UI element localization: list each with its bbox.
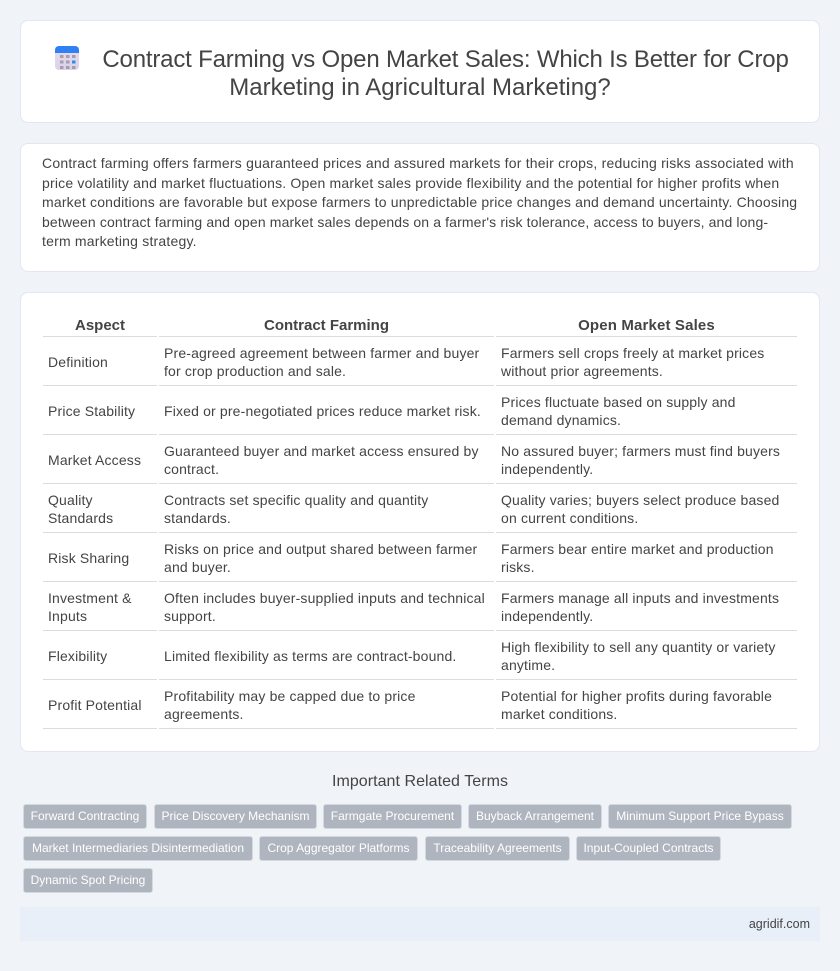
row: Flexibility: anytime. (501, 657, 555, 673)
row: Price Stability: demand dynamics. (501, 412, 621, 428)
row: Risk Sharing: Risks on price and output shared between farmer (164, 541, 477, 557)
tags: related terms: Minimum Support Price Bypass (616, 809, 784, 823)
footer bar (20, 907, 820, 941)
row: Market Access (48, 443, 780, 477)
tags: related terms: Traceability Agreements (433, 841, 562, 855)
row: Profit Potential: Profit Potential (48, 697, 142, 713)
icon: calendar (55, 46, 79, 70)
row: Market Access: Guaranteed buyer and market access ensured by (164, 443, 479, 459)
row: Flexibility: High flexibility to sell any quantity or variety (501, 639, 776, 655)
row: Quality Standards: Contracts set specific quality and quantity (164, 492, 428, 508)
intro paragraph: term marketing strategy. (42, 233, 197, 249)
title line 1: Contract Farming vs Open Market Sales: Which Is Better for Crop (102, 46, 789, 73)
intro paragraph: between contract farming and open market sales depends on a farmer's risk tolerance, access to buyers, and long- (42, 214, 768, 230)
row: Investment & Inputs: Inputs (48, 608, 87, 624)
heading: related terms: Important Related Terms (332, 773, 508, 790)
row: Flexibility: Limited flexibility as terms are contract-bound. (164, 648, 456, 664)
row: Profit Potential (48, 688, 772, 722)
row: Definition: without prior agreements. (501, 363, 663, 379)
tags: related terms: Crop Aggregator Platforms (267, 841, 410, 855)
row: Quality Standards: Standards (48, 510, 113, 526)
row: Quality Standards: on current conditions. (501, 510, 638, 526)
row: Investment & Inputs: Investment & (48, 590, 132, 606)
table header: Contract Farming: Contract Farming (264, 317, 389, 334)
tags: related terms: Farmgate Procurement (331, 809, 454, 823)
row: Risk Sharing: Farmers bear entire market and production (501, 541, 774, 557)
table header: Open Market Sales: Open Market Sales (578, 317, 715, 334)
row: Market Access: No assured buyer; farmers must find buyers (501, 443, 780, 459)
row: Price Stability: Prices fluctuate based on supply and (501, 394, 736, 410)
tags: related terms: Dynamic Spot Pricing (31, 873, 145, 887)
intro paragraph: Contract farming offers farmers guaranteed prices and assured markets for their crops, reducing risks associated with (42, 155, 794, 171)
row: Quality Standards: standards. (164, 510, 231, 526)
row: Price Stability (48, 394, 736, 428)
row: Definition: for crop production and sale. (164, 363, 346, 379)
tags: related terms: Forward Contracting (31, 809, 139, 823)
row: Quality Standards: Quality varies; buyers select produce based (501, 492, 779, 508)
title line 2: Marketing in Agricultural Marketing? (229, 74, 611, 101)
row: Risk Sharing (48, 541, 774, 575)
row: Risk Sharing: Risk Sharing (48, 550, 129, 566)
row: Profit Potential: agreements. (164, 706, 244, 722)
footer source: agridif.com (749, 917, 810, 931)
row: Market Access: Market Access (48, 452, 141, 468)
row: Risk Sharing: risks. (501, 559, 535, 575)
row: Quality Standards (48, 492, 779, 526)
row: Profit Potential: Profitability may be capped due to price (164, 688, 416, 704)
row: Risk Sharing: and buyer. (164, 559, 231, 575)
row: Definition: Definition (48, 354, 108, 370)
tags: related terms: Input-Coupled Contracts (583, 841, 714, 855)
row: Price Stability: Fixed or pre-negotiated prices reduce market risk. (164, 403, 481, 419)
row: Profit Potential: market conditions. (501, 706, 618, 722)
row: Market Access: contract. (164, 461, 219, 477)
tags: related terms (23, 804, 792, 893)
row: Profit Potential: Potential for higher profits during favorable (501, 688, 772, 704)
panel: title card (20, 20, 820, 123)
row: Definition: Farmers sell crops freely at market prices (501, 345, 764, 361)
intro paragraph: price volatility and market fluctuations. Open market sales provide flexibility and the potential for higher profits when (42, 174, 779, 190)
intro paragraph (42, 155, 797, 249)
tags: related terms: Buyback Arrangement (476, 809, 594, 823)
row: Investment & Inputs (48, 590, 779, 624)
row: Investment & Inputs: Farmers manage all inputs and investments (501, 590, 779, 606)
panel: intro text card (20, 143, 820, 272)
row: Flexibility: Flexibility (48, 648, 107, 664)
row: Investment & Inputs: support. (164, 608, 216, 624)
tags: related terms: Price Discovery Mechanism (161, 809, 310, 823)
row: Investment & Inputs: Often includes buyer-supplied inputs and technical (164, 590, 485, 606)
intro paragraph: market conditions are favorable but expose farmers to unpredictable price changes and demand uncertainty. Choosing (42, 194, 797, 210)
row: Definition (48, 345, 764, 379)
table header: Aspect: Aspect (75, 317, 125, 334)
panel: comparison table card (20, 292, 820, 752)
row: Investment & Inputs: independently. (501, 608, 593, 624)
row: Quality Standards: Quality (48, 492, 93, 508)
row: Flexibility (48, 639, 776, 673)
row: Market Access: independently. (501, 461, 593, 477)
row: Definition: Pre-agreed agreement between farmer and buyer (164, 345, 479, 361)
tags: related terms: Market Intermediaries Disintermediation (32, 841, 244, 855)
row: Price Stability: Price Stability (48, 403, 135, 419)
